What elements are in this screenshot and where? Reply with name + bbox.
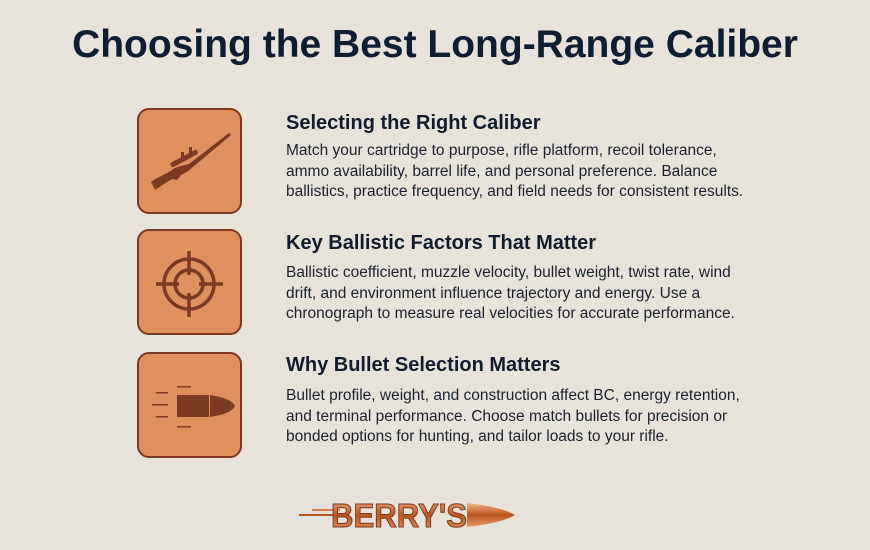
icon: bullet bbox=[137, 352, 242, 458]
icon: rifle bbox=[137, 108, 242, 214]
text: ballistic factors: Ballistic coefficient, muzzle velocity, bullet weight, twist rate, wind bbox=[286, 264, 731, 281]
heading: bullet selection: Why Bullet Selection Matters bbox=[286, 354, 560, 376]
text: selecting caliber: ammo availability, barrel life, and personal preference. Balance bbox=[286, 162, 717, 180]
text: selecting caliber: Match your cartridge to purpose, rifle platform, recoil tolerance, bbox=[286, 142, 717, 159]
text: ballistic factors: chronograph to measure real velocities for accurate performance. bbox=[286, 305, 735, 322]
text: bullet selection bbox=[286, 387, 740, 445]
logo: Berry's bbox=[299, 497, 515, 531]
heading: ballistic factors: Key Ballistic Factors That Matter bbox=[286, 232, 596, 254]
text: bullet selection: and terminal performance. Choose match bullets for precision or bbox=[286, 408, 727, 424]
text: ballistic factors bbox=[286, 264, 735, 322]
text: ballistic factors: drift, and environment influence trajectory and energy. Use a bbox=[286, 284, 700, 302]
title: Choosing the Best Long-Range Caliber bbox=[72, 23, 798, 66]
text: selecting caliber bbox=[286, 142, 743, 200]
icon: crosshair bbox=[137, 229, 242, 335]
text: bullet selection: bonded options for hunting, and tailor loads to your rifle. bbox=[286, 428, 669, 445]
heading: selecting caliber: Selecting the Right Caliber bbox=[286, 112, 540, 134]
text: selecting caliber: ballistics, practice frequency, and field needs for consistent results. bbox=[286, 183, 743, 200]
text: bullet selection: Bullet profile, weight, and construction affect BC, energy retention, bbox=[286, 387, 740, 404]
